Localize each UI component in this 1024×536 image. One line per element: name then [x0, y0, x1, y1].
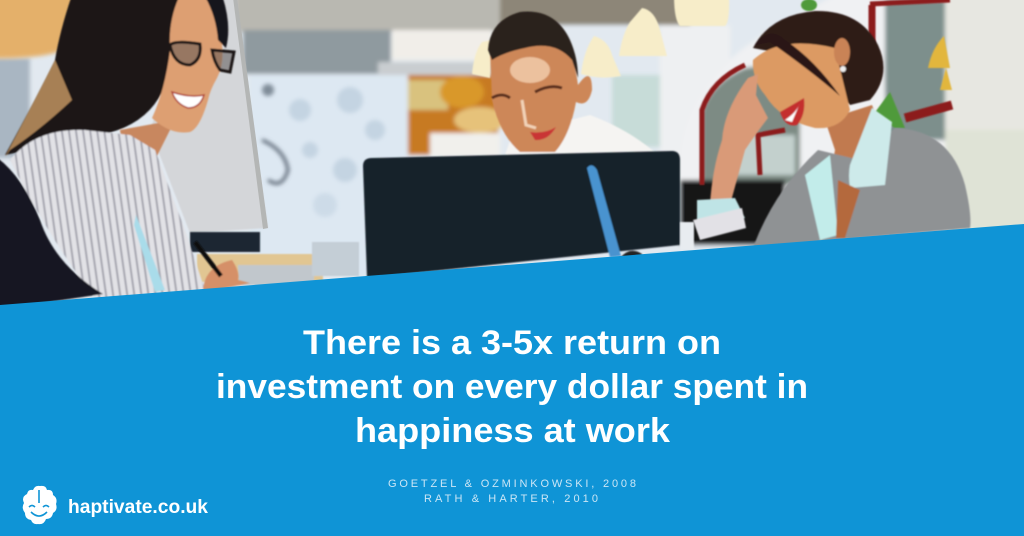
- blue pen: [587, 165, 621, 257]
- head: [490, 34, 592, 152]
- yellow lamps in window: [928, 36, 952, 90]
- mouth: [530, 127, 556, 140]
- woman with glasses: [0, 0, 250, 310]
- dark shoulder: [0, 156, 103, 310]
- source citations: GOETZEL & OZMINKOWSKI, 2008: [388, 478, 636, 490]
- headline: There is a 3-5x return on: [303, 324, 721, 362]
- hand and pen: [203, 260, 250, 292]
- neck: [120, 120, 175, 170]
- fringe strand: [755, 34, 840, 96]
- laughing mouth: [780, 98, 804, 125]
- jacket: [754, 128, 970, 247]
- slanted blue panel: [0, 224, 1024, 536]
- headline: [216, 324, 808, 450]
- hair: [753, 11, 883, 105]
- headline: investment on every dollar spent in: [216, 368, 808, 406]
- desk and shelf: [190, 232, 359, 285]
- nose: [522, 100, 536, 128]
- headline: happiness at work: [355, 412, 670, 450]
- photo: office team laughing around a laptop: [0, 0, 1024, 330]
- whiteboard: [150, 0, 268, 233]
- striped shirt: [10, 130, 205, 298]
- person at top-left: out-of-focus hand: [0, 0, 82, 58]
- ear and earring: [834, 38, 850, 66]
- source citations: [388, 478, 636, 505]
- wall mural blobs: [262, 84, 393, 217]
- cuff: [697, 198, 745, 226]
- laughing woman: [693, 11, 970, 247]
- red window frames: [702, 0, 952, 185]
- neck: [825, 105, 880, 205]
- eyes and brows: [492, 87, 562, 98]
- man behind laptop: [488, 12, 658, 155]
- smile: [172, 92, 204, 108]
- hair back: [5, 0, 178, 155]
- laptop: [363, 151, 680, 278]
- shirt: [505, 115, 658, 155]
- raised hand and forearm: [710, 74, 768, 205]
- glasses: [170, 42, 234, 72]
- sleeve of man beside laptop: [680, 222, 694, 250]
- face: [152, 0, 223, 132]
- office background: [0, 0, 1024, 330]
- collar and shirt: [849, 108, 892, 188]
- logo: smiling brain icon: [23, 486, 57, 524]
- shirt placket: [134, 215, 165, 292]
- face: [753, 44, 850, 128]
- website address: haptivate.co.uk: [68, 497, 208, 518]
- hair: [488, 12, 578, 78]
- hanging lamps: [472, 0, 729, 78]
- source citations: RATH & HARTER, 2010: [424, 493, 598, 505]
- plant accents: [801, 0, 905, 128]
- bright face highlight: [510, 57, 550, 83]
